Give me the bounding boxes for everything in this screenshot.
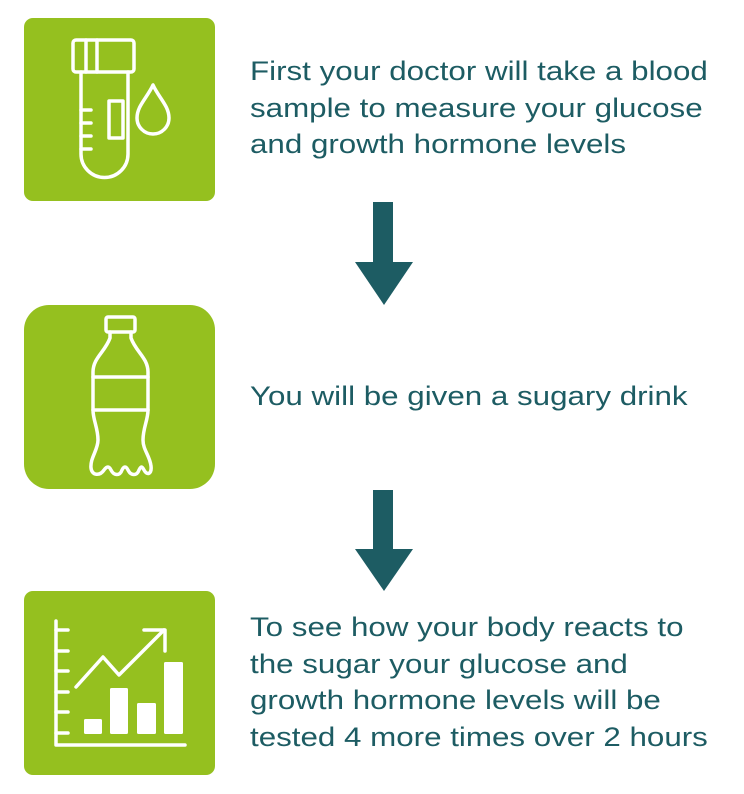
panel: chart icon box <box>24 591 215 775</box>
text: step 3: tested 4 more times over 2 hours <box>250 722 708 752</box>
arrow: step 1 to 2 <box>355 202 413 305</box>
text: step 3: To see how your body reacts to <box>250 612 683 642</box>
icon: bottle <box>91 317 151 474</box>
icon: bar chart <box>56 621 185 745</box>
text: step 3: the sugar your glucose and <box>250 649 628 679</box>
panel: drink icon box <box>24 305 215 489</box>
text: step 1: First your doctor will take a blood <box>250 56 708 86</box>
text: step 3 <box>250 612 708 752</box>
panel: blood test icon box <box>24 18 215 201</box>
text: step 1: sample to measure your glucose <box>250 93 703 123</box>
text: step 3: growth hormone levels will be <box>250 685 661 715</box>
text: step 1: and growth hormone levels <box>250 129 626 159</box>
arrow: step 2 to 3 <box>355 490 413 591</box>
icon: test tube and drop <box>73 40 169 178</box>
text: step 2: You will be given a sugary drink <box>250 381 688 411</box>
text: step 1 <box>250 56 708 159</box>
